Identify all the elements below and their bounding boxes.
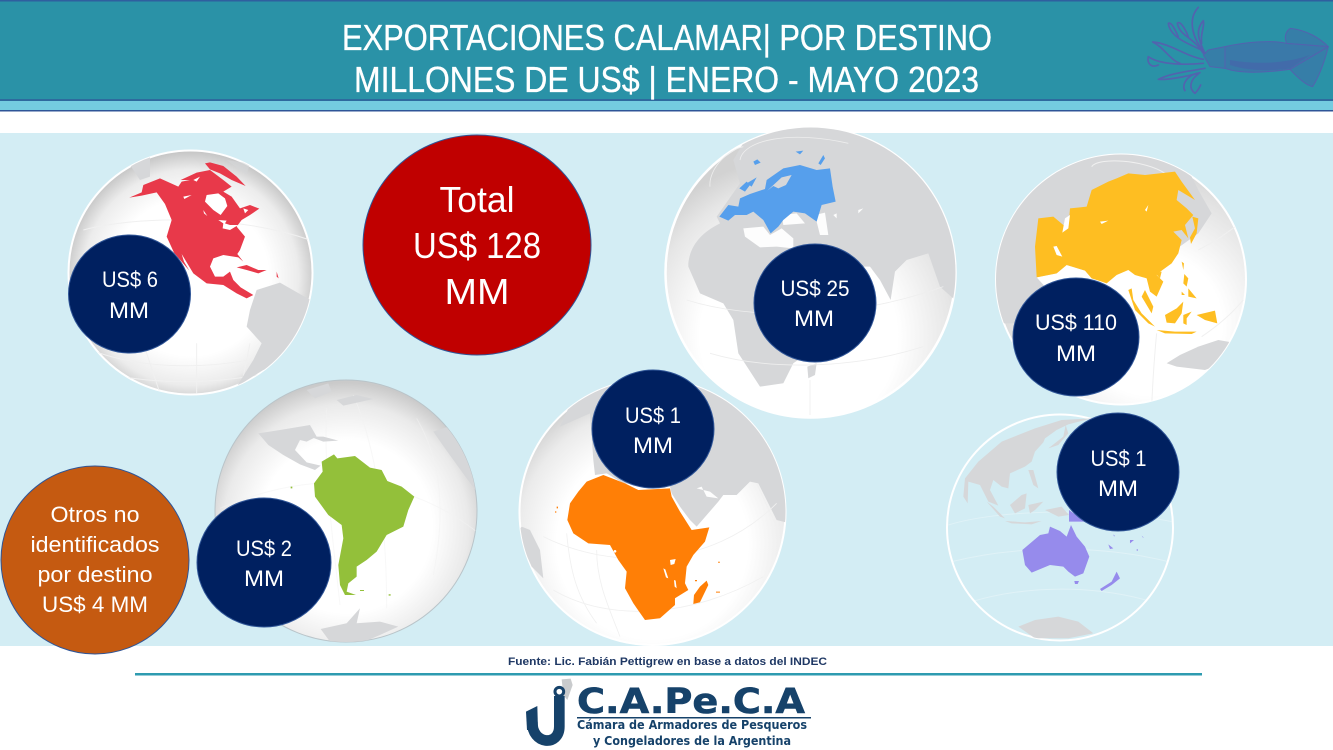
value badge: Oceania: MM [1098, 476, 1138, 501]
other destinations circle [1, 466, 189, 654]
globe: Asia [985, 150, 1246, 407]
globe: Oceania [947, 414, 1173, 640]
value badge: Oceania: US$ 1 [1090, 446, 1146, 471]
value badge: South America: MM [244, 566, 284, 591]
value badge: Oceania [1057, 413, 1179, 531]
footer divider [135, 673, 1202, 676]
logo: C.A.Pe.C.A: C.A.Pe.C.A [577, 682, 805, 722]
other destinations circle: identificados [30, 532, 160, 557]
logo: C.A.Pe.C.A: Cámara de Armadores de Pesqueros [577, 718, 807, 732]
icon: fish hook [526, 679, 573, 741]
value badge: South America [197, 498, 331, 627]
title [342, 17, 992, 100]
total circle: US$ 128 [413, 225, 541, 266]
value badge: Africa: MM [633, 433, 673, 458]
header banner [0, 0, 1333, 112]
value badge: North America: US$ 6 [102, 267, 158, 292]
total circle: MM [444, 271, 510, 312]
value badge: Asia: US$ 110 [1035, 310, 1117, 335]
globe: North America [68, 150, 317, 394]
value badge: North America [68, 235, 190, 353]
logo: C.A.Pe.C.A [526, 679, 811, 748]
globe: Africa [517, 377, 803, 645]
value badge: Europe [754, 244, 876, 362]
value badge: Europe: US$ 25 [780, 276, 850, 301]
value badge: South America: US$ 2 [236, 536, 292, 561]
value badge: Europe: MM [794, 306, 834, 331]
other destinations circle: US$ 4 MM [42, 592, 148, 617]
globe: South America [215, 380, 483, 645]
value badge: Asia: MM [1056, 341, 1096, 366]
map panel background [0, 133, 1333, 646]
total circle: Total [440, 179, 514, 220]
other destinations circle: por destino [38, 562, 152, 587]
logo: C.A.Pe.C.A: y Congeladores de la Argentina [593, 734, 791, 748]
value badge: Asia [1013, 278, 1139, 396]
icon: squid [1148, 7, 1328, 93]
value badge: Africa: US$ 1 [625, 403, 681, 428]
total circle [363, 135, 591, 355]
globe: Europe [666, 120, 970, 418]
other destinations circle: Otros no [50, 502, 140, 527]
title: MILLONES DE US$ | ENERO - MAYO 2023 [354, 59, 979, 100]
value badge: North America: MM [109, 298, 149, 323]
title: EXPORTACIONES CALAMAR| POR DESTINO [342, 17, 992, 58]
source note: Fuente: Lic. Fabián Pettigrew en base a datos del INDEC [508, 656, 827, 668]
value badge: Africa [592, 370, 714, 488]
